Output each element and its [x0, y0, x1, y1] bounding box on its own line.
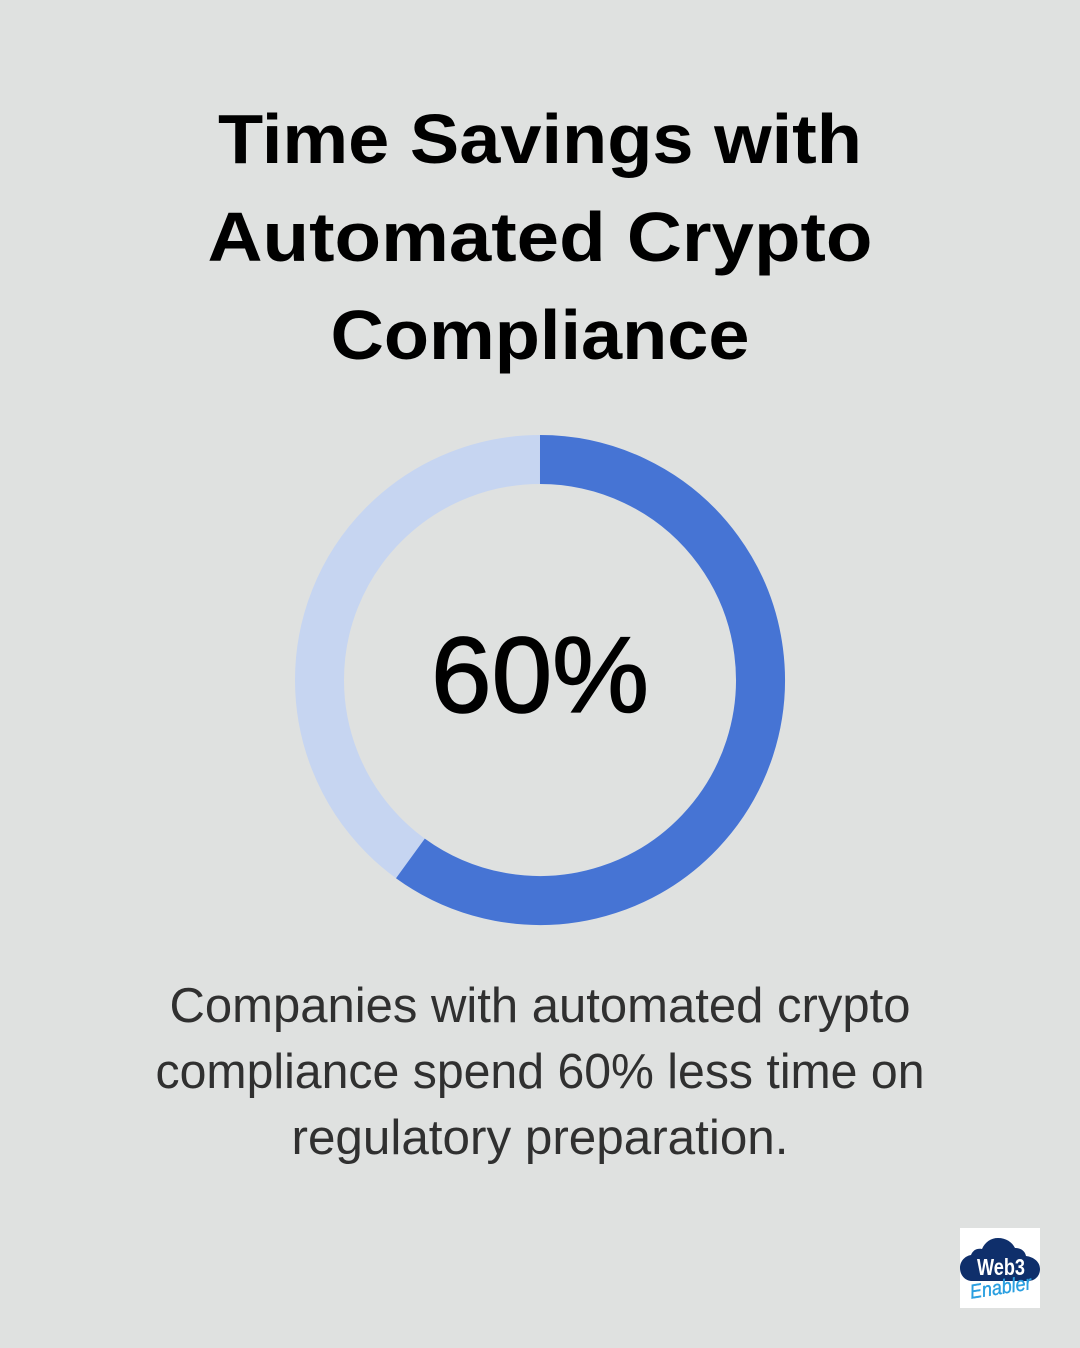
logo word: Web3: Web3	[977, 1254, 1025, 1280]
highlighted 60% arc	[410, 460, 760, 900]
description text	[156, 979, 924, 1165]
title: Automated Crypto	[208, 198, 872, 276]
logo: Web3 Enabler	[960, 1228, 1040, 1308]
logo word: Enabler: Enabler	[968, 1272, 1034, 1304]
title: Compliance	[330, 296, 750, 374]
logo cloud	[960, 1238, 1040, 1281]
description text: Companies with automated crypto	[170, 979, 910, 1033]
donut chart: 60%	[320, 460, 760, 900]
description text: regulatory preparation.	[292, 1111, 788, 1165]
remaining 40% ring	[320, 460, 760, 900]
title	[208, 100, 872, 374]
title: Time Savings with	[218, 100, 862, 178]
center value: 60%	[431, 614, 649, 735]
description text: compliance spend 60% less time on	[156, 1045, 924, 1099]
